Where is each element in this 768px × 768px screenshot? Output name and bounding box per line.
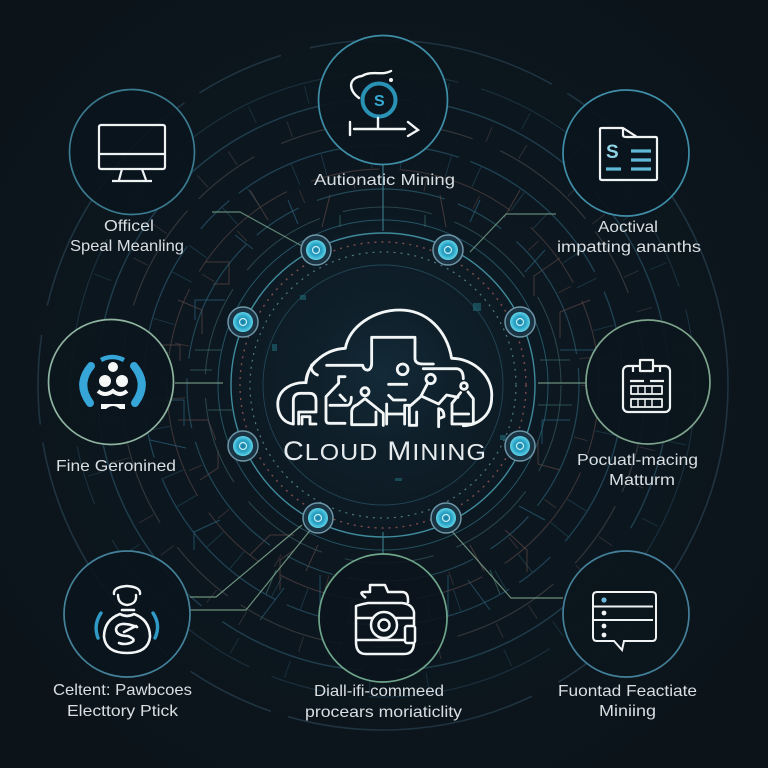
panel: Pocuatl-macing Matturm xyxy=(577,320,710,489)
circuit traces xyxy=(150,190,600,620)
label: Officel xyxy=(104,218,154,235)
badge circle xyxy=(563,551,689,677)
panel: Fine Geronined xyxy=(48,320,176,475)
label: Miniing xyxy=(599,703,656,720)
panel: Officel Speal Meanling xyxy=(70,90,194,255)
title: Cloud Mining: CLOUD MINING xyxy=(283,436,487,466)
panel: Celtent Pawbcoes Electtory Ptick xyxy=(53,551,192,720)
node: lower left xyxy=(303,503,333,533)
label: procears moriaticlity xyxy=(305,704,462,721)
label: Electtory Ptick xyxy=(67,703,179,720)
panel: Fuontad Feactiate Miniing xyxy=(558,551,697,720)
label: impatting ananths xyxy=(557,239,701,256)
label xyxy=(70,218,184,255)
icon: figure with side arcs xyxy=(83,357,142,409)
label: Diall-ifi-commeed xyxy=(314,683,444,700)
central cloud icon xyxy=(278,310,492,427)
node: left lower xyxy=(228,431,258,461)
label xyxy=(305,683,462,721)
icon: document with dollar and lines xyxy=(600,128,657,180)
node: lower right xyxy=(431,503,461,533)
label xyxy=(558,683,697,720)
label: Aoctival xyxy=(598,219,658,236)
teal glints around the cloud xyxy=(272,295,506,481)
icon: server speech bubble xyxy=(593,592,656,650)
label xyxy=(53,682,192,720)
icon: camera xyxy=(356,585,415,654)
label xyxy=(577,452,698,489)
icon: document with dollar and lines: S xyxy=(606,142,619,163)
icon: monitor xyxy=(99,125,165,181)
node: right upper xyxy=(505,307,535,337)
icon: coin on arrow xyxy=(350,71,418,136)
badge circle xyxy=(48,320,174,444)
label xyxy=(557,219,701,256)
node: upper right top xyxy=(433,235,463,265)
label: Autionatic Mining xyxy=(314,172,455,189)
icon: coin on arrow: S xyxy=(374,93,385,110)
panel: Automatic Mining xyxy=(314,36,455,189)
label: Celtent: Pawbcoes xyxy=(53,682,192,699)
label: Fuontad Feactiate xyxy=(558,683,697,700)
badge circle xyxy=(586,320,710,444)
label: Pocuatl-macing xyxy=(577,452,698,469)
badge circle xyxy=(319,554,447,682)
connector lines xyxy=(175,165,586,610)
badge circle xyxy=(318,36,448,164)
node: right lower xyxy=(505,431,535,461)
badge circle xyxy=(64,551,190,677)
icon: calendar xyxy=(623,360,670,412)
panel: Aoctival impatting ananths xyxy=(557,90,701,256)
node: left upper xyxy=(228,307,258,337)
panel: Diall-ifi-commeed procears moriaticlity xyxy=(305,554,462,721)
label: Fine Geronined xyxy=(56,458,176,475)
node: upper left top xyxy=(301,235,331,265)
badge circle xyxy=(70,90,194,214)
inner rings xyxy=(218,220,548,550)
badge circle xyxy=(563,90,689,216)
label: Matturm xyxy=(609,472,675,489)
icon: money bag xyxy=(96,586,158,653)
label: Speal Meanling xyxy=(70,238,184,255)
